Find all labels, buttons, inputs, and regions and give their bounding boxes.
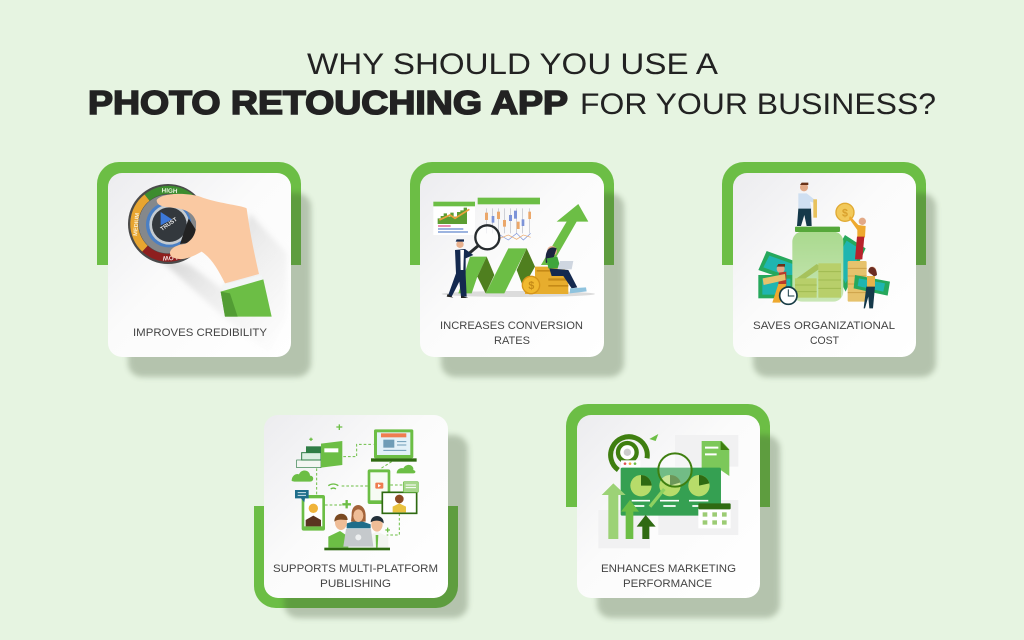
icon: trust dial with hand: HIGH — [161, 187, 178, 195]
label: IMPROVES CREDIBILITY — [133, 327, 268, 339]
icon: trust dial with hand: LOW — [162, 253, 178, 261]
panel: increases conversion rates — [410, 162, 624, 377]
label: RATES — [494, 335, 530, 347]
icon: savings jar and money — [758, 183, 890, 308]
label: ENHANCES MARKETING — [601, 563, 736, 575]
icon: growth chart with analyst — [433, 198, 595, 298]
panel: saves organizational cost — [722, 162, 936, 377]
label: INCREASES CONVERSION — [440, 320, 583, 332]
label — [753, 320, 895, 347]
icon: savings jar and money: $ — [842, 207, 848, 219]
icon: growth chart with analyst: $ — [528, 280, 534, 292]
title: WHY SHOULD YOU USE A — [307, 48, 718, 81]
panel: improves credibility — [97, 162, 311, 377]
label — [601, 563, 736, 590]
icon: marketing dashboard — [598, 434, 738, 548]
label — [440, 320, 583, 347]
label: COST — [810, 335, 839, 347]
label — [273, 563, 438, 590]
title: FOR YOUR BUSINESS? — [580, 88, 936, 121]
icon: trust dial with hand: TRUST — [160, 217, 179, 233]
label: PUBLISHING — [320, 578, 391, 590]
title — [88, 48, 936, 122]
label: PERFORMANCE — [623, 578, 712, 590]
icon: trust dial with hand: MEDIUM — [133, 213, 141, 236]
infographic canvas — [90, 53, 939, 621]
label: SUPPORTS MULTI-PLATFORM — [273, 563, 438, 575]
label: SAVES ORGANIZATIONAL — [753, 320, 895, 332]
panel: supports multi-platform publishing — [254, 415, 468, 618]
title: PHOTO RETOUCHING APP — [88, 85, 568, 122]
panel: enhances marketing performance — [566, 404, 780, 618]
icon: connected devices and team — [292, 424, 418, 550]
icon: trust dial with hand — [128, 184, 284, 320]
